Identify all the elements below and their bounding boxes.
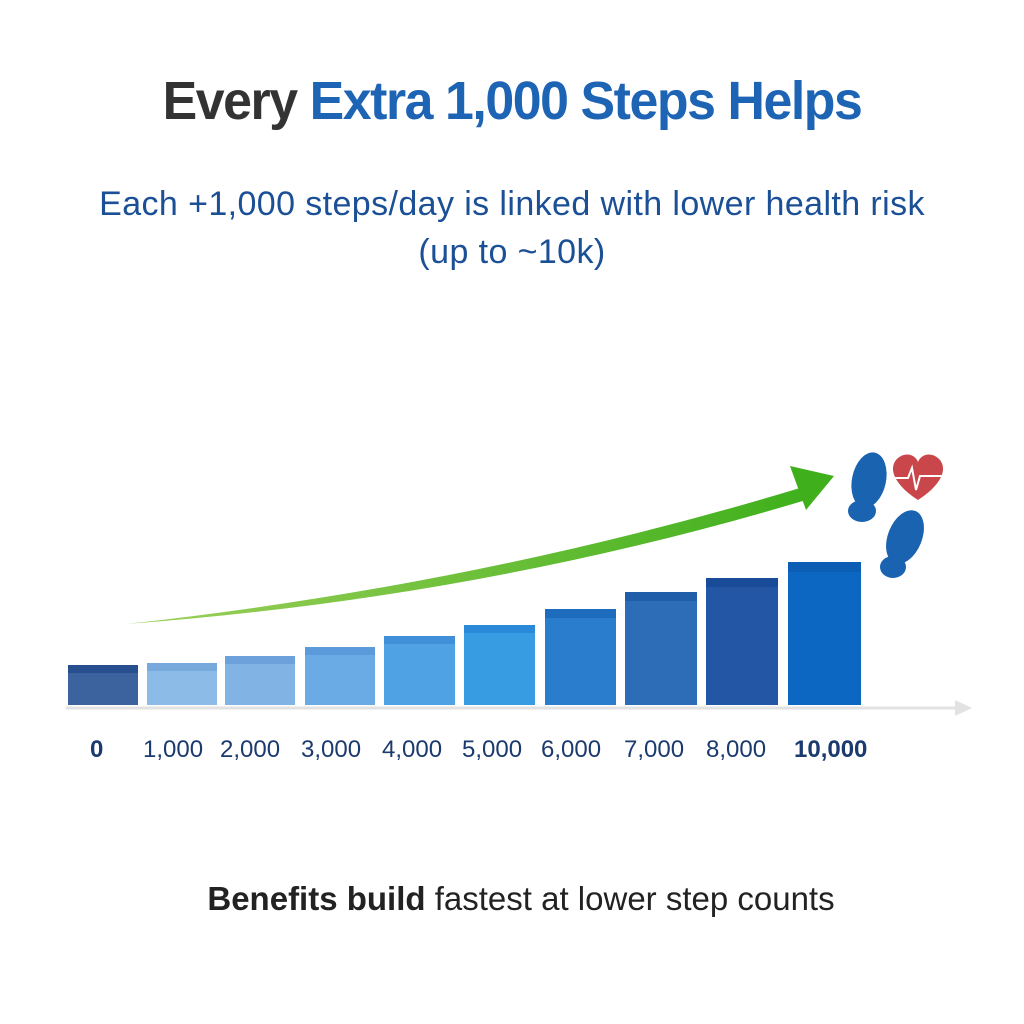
axis labels: 8,000 bbox=[706, 736, 766, 763]
icon: footprints bbox=[847, 449, 931, 578]
green arrow bbox=[126, 466, 834, 624]
axis labels: 1,000 bbox=[143, 736, 203, 763]
axis labels: 0 bbox=[90, 736, 103, 763]
axis labels: 4,000 bbox=[382, 736, 442, 763]
axis labels bbox=[90, 736, 867, 763]
footer text: Benefits build fastest at lower step counts bbox=[207, 880, 835, 917]
axis labels: 10,000 bbox=[794, 736, 867, 763]
subtitle: Each +1,000 steps/day is linked with lower health risk bbox=[99, 185, 925, 223]
axis labels: 3,000 bbox=[301, 736, 361, 763]
axis bbox=[66, 700, 972, 716]
axis labels: 2,000 bbox=[220, 736, 280, 763]
title: Every Extra 1,000 Steps Helps bbox=[163, 71, 861, 131]
axis labels: 7,000 bbox=[624, 736, 684, 763]
axis labels: 6,000 bbox=[541, 736, 601, 763]
axis labels: 5,000 bbox=[462, 736, 522, 763]
bars bbox=[68, 562, 861, 705]
icon: heart bbox=[893, 454, 944, 500]
subtitle bbox=[99, 185, 925, 271]
subtitle: (up to ~10k) bbox=[418, 233, 606, 271]
